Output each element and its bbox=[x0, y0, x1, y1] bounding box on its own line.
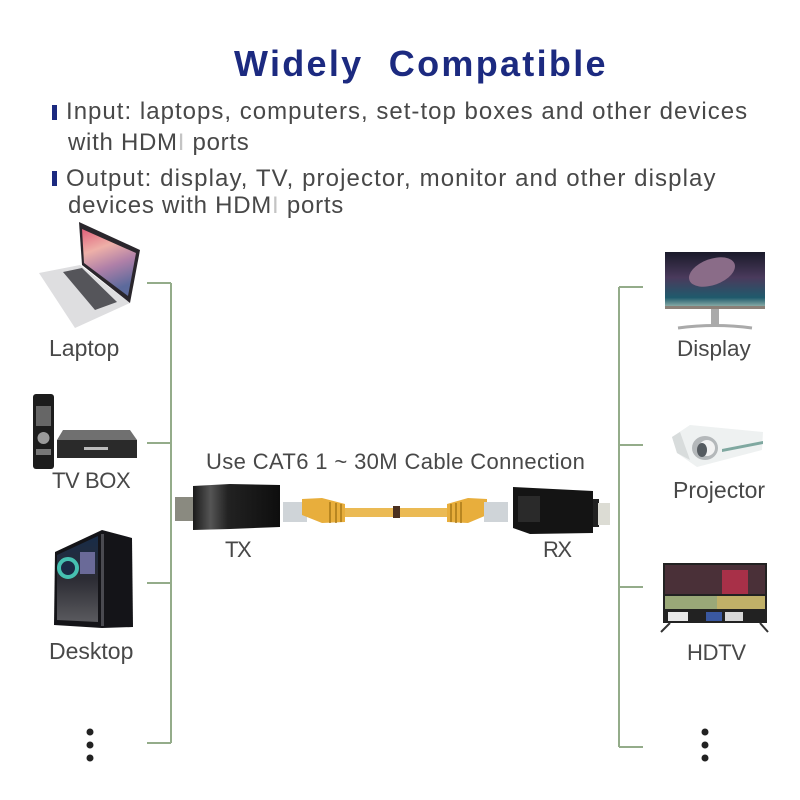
title: Widely Compatible bbox=[234, 43, 608, 84]
icon: left ellipsis bbox=[86, 728, 94, 762]
label: Projector: Projector bbox=[673, 477, 765, 503]
cable caption: Use CAT6 1 ~ 30M Cable Connection bbox=[206, 449, 585, 474]
icon: TX adapter bbox=[175, 484, 280, 530]
label: RX: RX bbox=[543, 537, 571, 562]
output text: devices with HDMI ports bbox=[68, 192, 344, 219]
label: TX: TX bbox=[225, 537, 250, 562]
output text: Output: display, TV, projector, monitor and other display bbox=[66, 165, 717, 192]
label: Desktop: Desktop bbox=[49, 638, 133, 664]
icon: hdtv bbox=[661, 563, 768, 632]
icon: projector bbox=[672, 425, 763, 467]
icon: right ellipsis bbox=[702, 728, 708, 762]
icon: laptop bbox=[39, 222, 140, 328]
icon: desktop tower bbox=[54, 530, 133, 628]
input text bbox=[66, 98, 748, 156]
icon: RX adapter bbox=[513, 487, 610, 534]
input text: Input: laptops, computers, set-top boxes and other devices bbox=[66, 98, 748, 125]
bullet: input bbox=[52, 105, 57, 120]
label: HDTV: HDTV bbox=[687, 640, 746, 665]
label: Laptop: Laptop bbox=[49, 335, 119, 361]
right bracket bbox=[619, 287, 643, 747]
input text: with HDMI ports bbox=[68, 129, 250, 156]
label: Display: Display bbox=[677, 336, 751, 361]
icon: monitor bbox=[665, 252, 765, 328]
label: TV BOX: TV BOX bbox=[52, 468, 130, 493]
icon: ethernet cable bbox=[283, 498, 508, 523]
bullet: output bbox=[52, 171, 57, 186]
output text bbox=[66, 165, 717, 219]
left bracket bbox=[147, 283, 171, 743]
icon: tv box and remote bbox=[33, 394, 137, 469]
